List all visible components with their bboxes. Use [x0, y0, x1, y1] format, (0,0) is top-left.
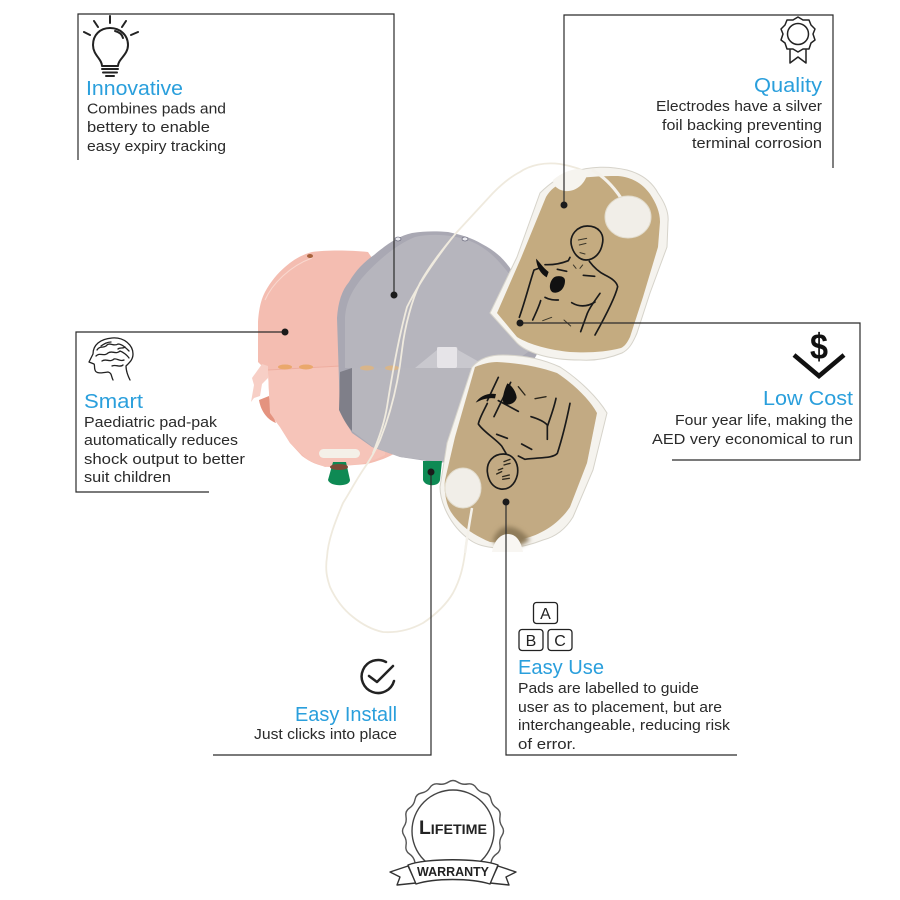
- icon: light bulb: [84, 16, 138, 76]
- body text: foil backing preventing: [662, 118, 822, 134]
- icon: award rosette: [781, 17, 815, 63]
- heading: Quality: [754, 75, 822, 97]
- body text: easy expiry tracking: [87, 139, 226, 155]
- body text: interchangeable, reducing risk: [518, 718, 731, 734]
- icon: head with brain: [89, 338, 133, 380]
- body text: [656, 99, 822, 152]
- badge: lifetime warranty: [390, 780, 516, 885]
- badge: lifetime warranty: LIFETIME: [419, 818, 487, 839]
- body text: Pads are labelled to guide: [518, 681, 699, 697]
- product: pad-pak cartridges and electrodes: [251, 163, 668, 632]
- icon: dollar with down arrow: [794, 326, 844, 376]
- leader frame to upper pad: [564, 15, 833, 205]
- body text: suit children: [84, 470, 171, 486]
- leader frame to grey cartridge: [78, 14, 394, 295]
- green pull tab: [328, 462, 350, 485]
- ribbon: WARRANTY: [417, 865, 490, 879]
- heading: Innovative: [86, 78, 183, 100]
- shadowed notch with adhesive tab: [493, 527, 530, 546]
- callout: Innovative: [78, 14, 398, 298]
- body text: user as to placement, but are: [518, 700, 722, 716]
- heading: Easy Install: [295, 704, 397, 726]
- body text: AED very economical to run: [652, 432, 853, 448]
- body text: Four year life, making the: [675, 413, 853, 429]
- leader frame to green tab: [213, 472, 431, 755]
- adhesive disc: [445, 468, 481, 508]
- icon: ABC blocks: C: [554, 633, 566, 650]
- icon: ABC blocks: A: [540, 606, 551, 623]
- leader frame to upper pad: [520, 323, 860, 460]
- cable over pad: [465, 508, 472, 553]
- green pull tab: [423, 461, 442, 485]
- body text: bettery to enable: [87, 120, 210, 136]
- body text: automatically reduces: [84, 433, 238, 449]
- placement drawing: lower ribs: [476, 377, 570, 489]
- body text: [84, 415, 245, 486]
- heading: Easy Use: [518, 657, 604, 679]
- body text: Combines pads and: [87, 102, 226, 118]
- paediatric pink cartridge: [251, 250, 410, 485]
- icon: check circle: [362, 660, 394, 693]
- body text: terminal corrosion: [692, 136, 822, 152]
- callout: Easy Install: [213, 468, 434, 755]
- lower electrode pad: [440, 355, 607, 553]
- placement drawing: upper chest: [519, 226, 618, 335]
- body text: [87, 102, 226, 155]
- heading: Low Cost: [763, 388, 853, 410]
- body text: [518, 681, 731, 753]
- upper electrode pad: [490, 167, 668, 360]
- callout: Smart: [76, 328, 288, 492]
- body text: of error.: [518, 737, 576, 753]
- leader frame to pink cartridge: [76, 332, 285, 492]
- adult grey cartridge: [337, 231, 545, 485]
- adhesive disc: [605, 196, 651, 238]
- callout: Low Cost: [516, 320, 860, 460]
- callout: Quality: [560, 15, 833, 208]
- body text: Just clicks into place: [254, 727, 397, 743]
- leader frame to lower pad: [506, 502, 737, 755]
- callout: Easy Use: [502, 498, 737, 755]
- body text: [652, 413, 853, 448]
- body text: Paediatric pad-pak: [84, 415, 218, 431]
- icon: ABC blocks: [519, 602, 572, 650]
- cable over pad: [592, 170, 621, 198]
- icon: dollar with down arrow: $: [810, 326, 828, 367]
- body text: shock output to better: [84, 452, 245, 468]
- icon: ABC blocks: B: [526, 633, 536, 650]
- body text: Electrodes have a silver: [656, 99, 822, 115]
- electrode cable: [326, 163, 620, 632]
- heading: Smart: [84, 391, 143, 413]
- small adhesive tab: [553, 169, 588, 191]
